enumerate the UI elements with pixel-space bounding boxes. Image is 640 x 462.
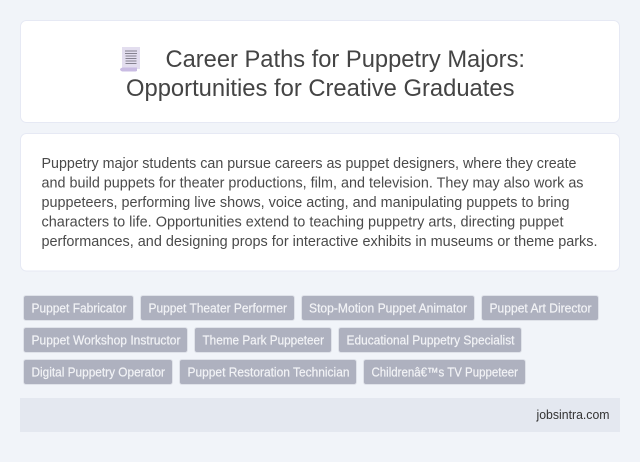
footer source text: jobsintra.com xyxy=(536,408,610,422)
text block: description: puppeteers, performing live shows, voice acting, and manipulating puppets to bring xyxy=(42,194,570,211)
title xyxy=(126,46,525,102)
tag: Puppet Fabricator xyxy=(32,302,126,316)
panel: description xyxy=(20,134,620,271)
tag xyxy=(338,328,522,352)
tag xyxy=(482,296,598,320)
tag: Stop-Motion Puppet Animator xyxy=(309,302,467,316)
text block: description: performances, and designing props for interactive exhibits in museums or theme parks. xyxy=(42,233,598,250)
tag: Puppet Restoration Technician xyxy=(188,366,350,380)
tags: career paths xyxy=(24,296,598,384)
tag: Educational Puppetry Specialist xyxy=(346,334,515,348)
text block: description xyxy=(42,155,598,250)
tag xyxy=(24,360,172,384)
tag xyxy=(140,296,294,320)
tag xyxy=(24,328,188,352)
text block: description: and build puppets for theater productions, film, and television. They may also work as xyxy=(42,174,584,192)
tag xyxy=(194,328,332,352)
tag: Digital Puppetry Operator xyxy=(32,366,165,380)
tag xyxy=(180,360,356,384)
tag xyxy=(24,296,134,320)
tag: Puppet Art Director xyxy=(490,302,592,316)
tag xyxy=(302,296,474,320)
panel: header xyxy=(20,20,620,122)
tag: Theme Park Puppeteer xyxy=(202,334,324,348)
text block: description: characters to life. Opportunities extend to teaching puppetry arts, directing puppet xyxy=(42,214,564,230)
footer xyxy=(20,398,620,432)
title: Opportunities for Creative Graduates xyxy=(126,75,514,102)
tag xyxy=(364,360,526,384)
tag: Puppet Theater Performer xyxy=(148,302,287,316)
icon: scroll xyxy=(120,47,140,72)
title: Career Paths for Puppetry Majors: xyxy=(166,46,525,73)
text block: description: Puppetry major students can pursue careers as puppet designers, where they create xyxy=(42,155,576,172)
tag: Puppet Workshop Instructor xyxy=(32,334,180,348)
tag: Childrenâ€™s TV Puppeteer xyxy=(372,366,518,380)
